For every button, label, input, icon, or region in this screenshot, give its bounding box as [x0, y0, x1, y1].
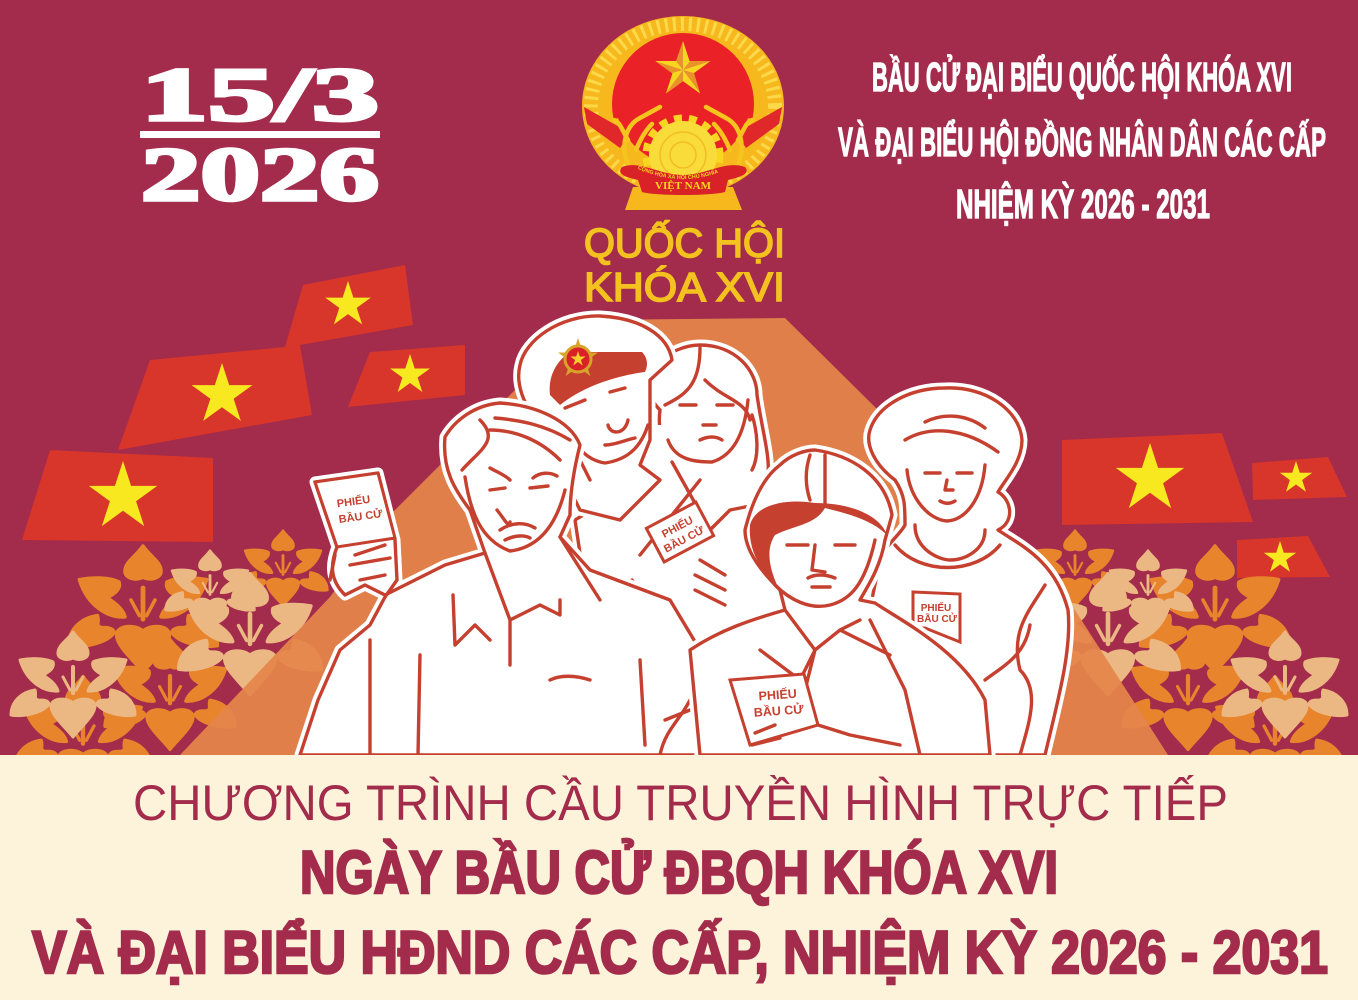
flag group left: [22, 265, 465, 542]
figure: old man with ballot: [300, 403, 725, 755]
ballot: worker: PHIẾU: [758, 686, 797, 703]
ballot: old man: [315, 473, 395, 547]
flag group right: [1062, 433, 1347, 578]
ballot: back woman: BẦU CỬ: [662, 523, 707, 556]
bottom title line 1: NGÀY BẦU CỬ ĐBQH KHÓA XVI: [300, 839, 1058, 906]
ballot: old man: BẦU CỬ: [338, 507, 384, 526]
ballot: worker: [730, 674, 818, 745]
ballot: back woman: [646, 502, 714, 562]
orange mountain behind figures: [180, 318, 1168, 755]
national emblem: [582, 16, 784, 210]
officer cap band: [550, 352, 647, 405]
worker hair: [750, 501, 887, 587]
election title: [838, 53, 1326, 227]
date: 15/3: [141, 53, 379, 137]
ballot: old man: PHIẾU: [336, 493, 371, 510]
date: 2026: [141, 133, 379, 217]
date: [140, 53, 380, 217]
heading: quoc hoi: QUỐC HỘI: [584, 220, 785, 266]
bottom band: [0, 755, 1358, 1000]
bottom subtitle: CHƯƠNG TRÌNH CẦU TRUYỀN HÌNH TRỰC TIẾP: [133, 775, 1228, 831]
heading: quoc hoi: [584, 220, 785, 310]
flowers right: [1030, 530, 1347, 792]
ballot: turban woman: PHIẾU: [921, 601, 951, 614]
figure: police officer: [519, 316, 672, 520]
national emblem: VIỆT NAM: [655, 179, 711, 192]
figure: woman in turban: [840, 388, 1069, 755]
emblem small text: CỘNG HÒA XÃ HỘI CHỦ NGHĨA: [638, 166, 718, 180]
flowers left: [11, 530, 328, 792]
ballot: turban woman: [913, 592, 960, 642]
figure: woman behind: [575, 345, 800, 700]
ballot: worker: BẦU CỬ: [753, 701, 805, 720]
heading: quoc hoi: KHÓA XVI: [584, 264, 785, 310]
ballot: turban woman: BẦU CỬ: [917, 612, 958, 625]
ballot: back woman: PHIẾU: [660, 513, 695, 541]
figure: worker with hard hat: [690, 450, 990, 755]
